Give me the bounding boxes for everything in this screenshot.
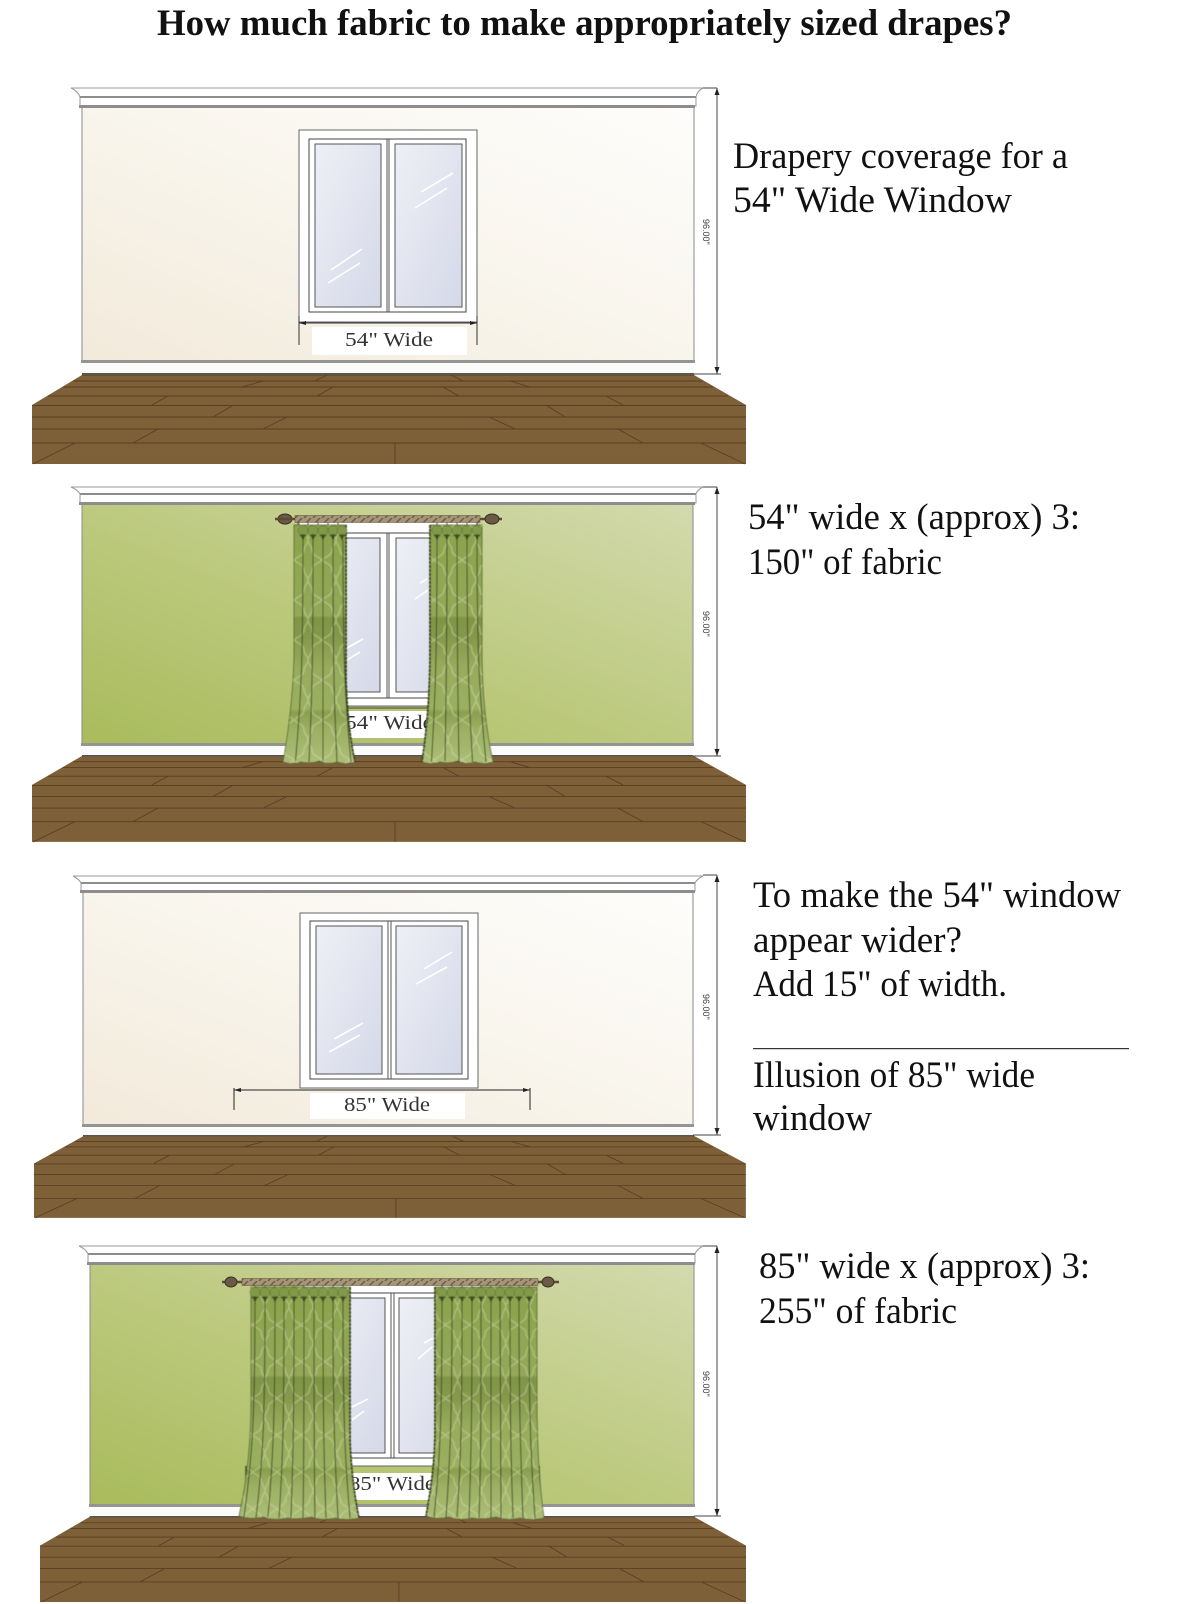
height dimension — [694, 1246, 721, 1516]
width label — [310, 1093, 465, 1119]
wall — [82, 106, 694, 362]
baseboard — [89, 1504, 695, 1518]
panel: 85 inch treatment with drapes — [40, 1246, 746, 1602]
wall — [90, 1263, 694, 1505]
height dimension: 96.00" — [701, 219, 711, 245]
panel: 54 inch window with drapes — [32, 487, 746, 842]
caption: appear wider: window — [753, 1098, 872, 1139]
height dimension: 96.00" — [701, 611, 711, 637]
caption: 255 inches of fabric — [759, 1246, 1090, 1332]
crown moulding — [79, 1246, 703, 1265]
window — [300, 913, 478, 1088]
height dimension — [693, 487, 721, 756]
width dimension — [234, 1088, 530, 1110]
height dimension: 96.00" — [701, 1371, 711, 1397]
left drape — [239, 1279, 539, 1520]
wall — [82, 503, 693, 745]
crown moulding — [73, 876, 703, 893]
panel: bare 54 inch window — [32, 88, 746, 464]
height dimension — [693, 875, 721, 1135]
caption: 150 inches of fabric: 150" of fabric — [748, 542, 942, 583]
caption: appear wider: appear wider? — [753, 920, 962, 961]
window — [303, 1284, 481, 1466]
floor — [40, 1517, 746, 1602]
width label: 54" Wide — [345, 329, 433, 351]
baseboard — [82, 1124, 694, 1136]
baseboard — [81, 743, 694, 756]
caption: 255 inches of fabric: 85" wide x (approx) 3: — [759, 1246, 1090, 1287]
caption: appear wider: Add 15" of width. — [753, 964, 1007, 1005]
width label — [312, 711, 467, 738]
caption: appear wider: To make the 54" window — [753, 875, 1121, 916]
width label: 54" Wide — [345, 712, 433, 734]
caption: coverage: 54" Wide Window — [733, 180, 1012, 221]
window — [299, 130, 477, 322]
caption: 150 inches of fabric: 54" wide x (approx) 3: — [748, 497, 1080, 538]
right drape — [422, 516, 493, 764]
width label: 85" Wide — [344, 1094, 430, 1116]
width label: 85" Wide — [349, 1473, 435, 1495]
left drape — [283, 516, 355, 764]
width label — [315, 1473, 470, 1500]
floor — [34, 1136, 746, 1218]
caption: appear wider — [753, 875, 1129, 1139]
window — [299, 518, 477, 708]
crown moulding — [71, 88, 703, 108]
curtain rod — [275, 514, 502, 524]
caption: 255 inches of fabric: 255" of fabric — [759, 1291, 957, 1332]
caption: coverage: Drapery coverage for a — [733, 136, 1068, 177]
floor — [32, 375, 746, 464]
floor — [32, 756, 746, 842]
wall — [83, 891, 693, 1125]
height dimension: 96.00" — [701, 994, 711, 1020]
width label — [312, 327, 467, 355]
height dimension — [694, 88, 721, 374]
caption: coverage — [733, 136, 1068, 221]
curtain rod — [222, 1277, 559, 1287]
right drape — [426, 1279, 544, 1520]
title: How much fabric to make appropriately sized drapes? — [157, 3, 1012, 44]
width dimension — [299, 316, 477, 345]
crown moulding — [71, 487, 703, 505]
baseboard — [81, 360, 695, 374]
panel: window with 85 inch illusion — [34, 875, 746, 1218]
caption: appear wider: Illusion of 85" wide — [753, 1055, 1035, 1096]
caption: 150 inches of fabric — [748, 497, 1080, 583]
